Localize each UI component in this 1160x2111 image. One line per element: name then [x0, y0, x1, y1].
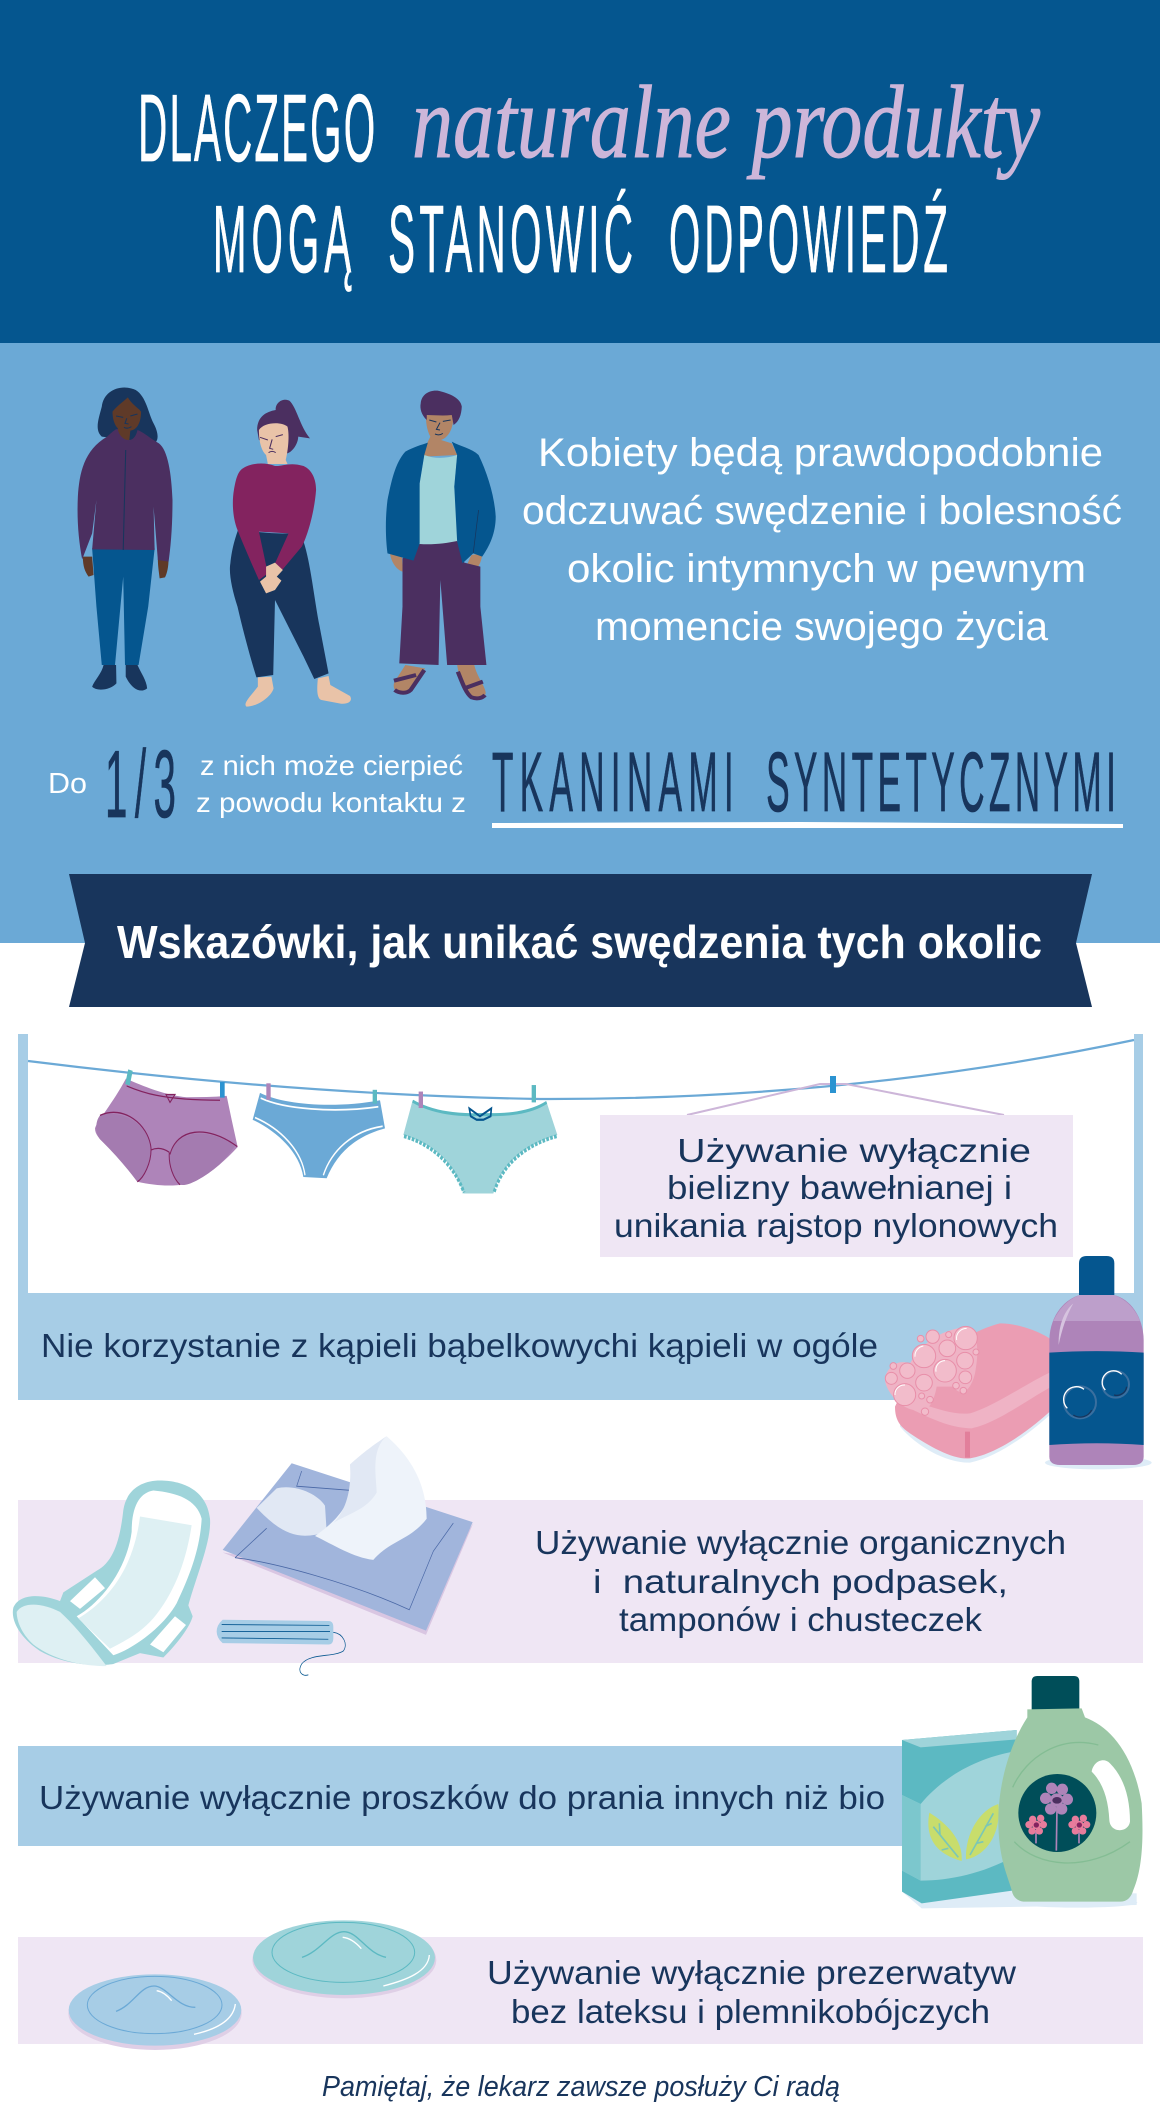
panel: intro background — [0, 343, 1160, 943]
statistic: one third: Do — [48, 768, 87, 800]
footer note: Pamiętaj, że lekarz zawsze posłuży Ci radą — [322, 2071, 840, 2103]
statistic: one third — [48, 730, 466, 838]
tip bar: bubble baths — [18, 1293, 1143, 1400]
hanging sign strings and peg — [687, 1076, 1004, 1115]
powder box — [902, 1730, 1137, 1908]
statistic: one third: z powodu kontaktu z — [196, 787, 466, 818]
highlighted phrase: synthetic fabrics — [492, 735, 1123, 829]
text block: intro statement: Kobiety będą prawdopodobnie — [538, 431, 1103, 475]
panel: header — [0, 0, 1160, 343]
title — [138, 65, 1041, 293]
tip bar: organic pads: Używanie wyłącznie organicznych — [535, 1524, 1066, 1561]
tip card: cotton underwear: unikania rajstop nylonowych — [614, 1207, 1058, 1244]
soap — [885, 1323, 1052, 1463]
purple briefs — [95, 1069, 238, 1186]
tip bar: detergents — [18, 1746, 918, 1846]
clothesline — [28, 1040, 1134, 1099]
highlighted phrase: synthetic fabrics: SYNTETYCZNYMI — [766, 735, 1116, 829]
illustration: pad, wipes and tampon — [13, 1436, 473, 1675]
text block: intro statement: odczuwać swędzenie i bolesność — [522, 489, 1122, 533]
tip bar: condoms: bez lateksu i plemnikobójczych — [511, 1993, 990, 2030]
highlighted phrase: synthetic fabrics: TKANINAMI — [492, 735, 734, 829]
tampon — [217, 1620, 345, 1675]
clothesline posts — [18, 1034, 1143, 1304]
condom blue — [68, 1974, 242, 2050]
tip bar: organic pads: tamponów i chusteczek — [619, 1601, 983, 1638]
condom teal — [252, 1920, 436, 1998]
illustration: underwear on the line — [95, 1069, 557, 1193]
bottle — [1045, 1256, 1152, 1469]
text block: intro statement: okolic intymnych w pewnym — [567, 547, 1086, 591]
text block: intro statement: momencie swojego życia — [595, 605, 1049, 649]
tip bar: detergents: Używanie wyłącznie proszków do prania innych niż bio — [39, 1779, 885, 1816]
illustration: condoms — [68, 1920, 436, 2050]
title: ODPOWIEDŹ — [669, 185, 948, 293]
detergent bottle — [998, 1676, 1142, 1908]
statistic: one third: 1/3 — [105, 730, 176, 838]
illustration: three people — [78, 387, 496, 707]
tip bar: bubble baths: Nie korzystanie z kąpieli bąbelkowychi kąpieli w ogóle — [41, 1327, 878, 1364]
tip card: cotton underwear — [600, 1115, 1073, 1257]
title: MOGĄ — [213, 185, 352, 293]
statistic: one third: z nich może cierpieć — [200, 750, 463, 781]
tip card: cotton underwear: bielizny bawełnianej i — [667, 1169, 1012, 1206]
title: STANOWIĆ — [388, 185, 633, 293]
tip bar: organic pads — [18, 1500, 1143, 1663]
sanitary pad — [13, 1481, 210, 1666]
teal briefs — [403, 1085, 557, 1193]
heading ribbon: Wskazówki, jak unikać swędzenia tych okolic — [117, 916, 1042, 968]
heading ribbon — [69, 874, 1092, 1007]
blue briefs — [253, 1083, 385, 1178]
illustration: soap and bottle — [885, 1256, 1152, 1469]
tip card: cotton underwear: Używanie wyłącznie — [677, 1132, 1031, 1169]
tip bar: condoms: Używanie wyłącznie prezerwatyw — [487, 1954, 1016, 1991]
illustration: washing powder and liquid — [902, 1676, 1142, 1908]
tip bar: condoms — [18, 1937, 1143, 2044]
text block: intro statement — [522, 431, 1122, 649]
wipes packet — [223, 1436, 473, 1635]
tip bar: organic pads: i naturalnych podpasek, — [593, 1563, 1008, 1600]
person 1 — [78, 387, 172, 691]
title: DLACZEGO — [138, 74, 375, 182]
person 2 — [230, 400, 351, 707]
person 3 — [386, 391, 496, 698]
